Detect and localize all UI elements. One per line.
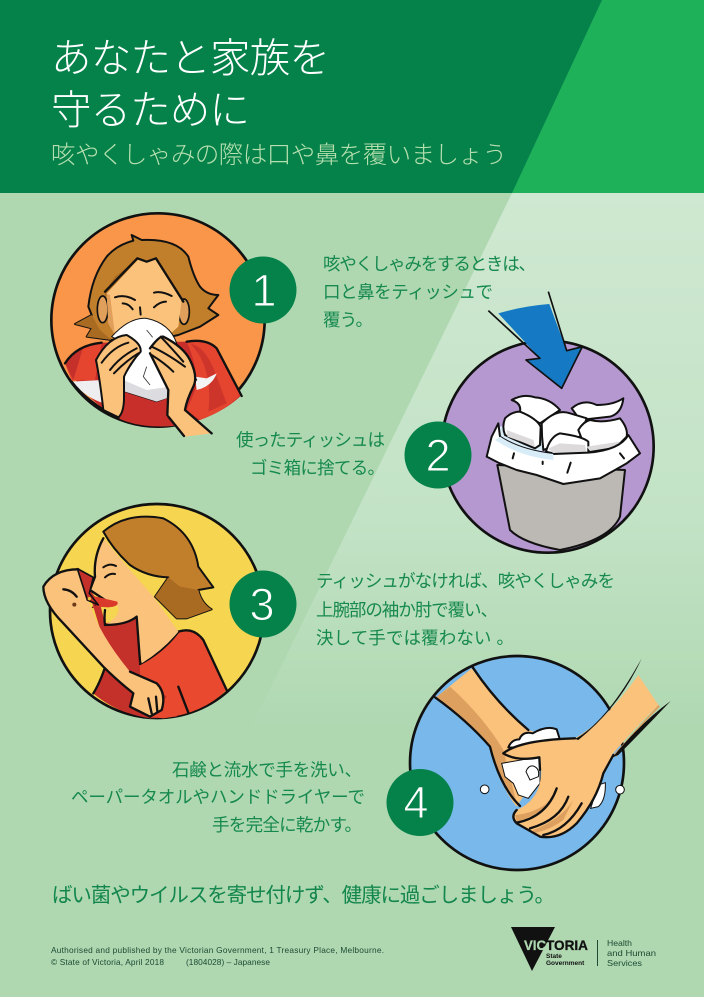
step 4 text: 手を完全に乾かす。 bbox=[212, 815, 362, 835]
badge 4 bbox=[386, 769, 454, 836]
illustration 4: washing hands bbox=[410, 656, 671, 870]
badge 3: 3 bbox=[249, 579, 275, 630]
badge 2: 2 bbox=[425, 430, 451, 481]
illustration 3: person sneezing into sleeve bbox=[43, 504, 264, 718]
illustration 2: tissues in a bin bbox=[442, 292, 654, 553]
header band bbox=[0, 0, 704, 193]
illustration 1: person sneezing into tissue bbox=[51, 213, 265, 437]
step 3 text: 決して手では覆わない 。 bbox=[316, 628, 514, 648]
badge 3 bbox=[230, 570, 296, 638]
step 3 text bbox=[316, 571, 615, 648]
lighter diagonal band bbox=[120, 193, 704, 997]
logo: Victoria State Government bbox=[511, 927, 656, 971]
title: 守るために bbox=[51, 87, 250, 133]
step 1 text: 覆う。 bbox=[323, 310, 373, 330]
badge 1: 1 bbox=[251, 265, 277, 316]
subtitle: 咳やくしゃみの際は口や鼻を覆いましょう bbox=[51, 141, 507, 169]
step 4 text: 石鹸と流水で手を洗い、 bbox=[172, 760, 362, 780]
logo: Victoria State Government: Health bbox=[607, 938, 632, 948]
footer credits: © State of Victoria, April 2018 bbox=[51, 957, 164, 967]
logo: Victoria State Government: Government bbox=[546, 960, 585, 967]
logo: Victoria State Government: State bbox=[546, 953, 562, 960]
logo: Victoria State Government: TORIA bbox=[546, 937, 588, 953]
step 1 text: 口と鼻をティッシュで bbox=[323, 282, 493, 302]
step 4 text: ペーパータオルやハンドドライヤーで bbox=[71, 787, 365, 807]
step 4 text bbox=[71, 760, 365, 835]
title bbox=[51, 35, 330, 133]
title: あなたと家族を bbox=[51, 35, 330, 81]
footer credits bbox=[51, 945, 384, 967]
step 2 text: 使ったティッシュは bbox=[236, 430, 385, 450]
step 3 text: ティッシュがなければ、咳やくしゃみを bbox=[316, 571, 615, 591]
footer credits: Authorised and published by the Victorian Government, 1 Treasury Place, Melbourne. bbox=[51, 945, 384, 955]
step 1 text: 咳やくしゃみをするときは、 bbox=[323, 254, 536, 274]
badge 2 bbox=[404, 422, 472, 488]
closing message: ばい菌やウイルスを寄せ付けず、健康に過ごしましょう。 bbox=[52, 884, 555, 907]
footer credits: (1804028) – Japanese bbox=[186, 957, 270, 967]
step 2 text bbox=[236, 430, 385, 478]
step 2 text: ゴミ箱に捨てる。 bbox=[250, 458, 385, 478]
logo: Victoria State Government: VIC bbox=[524, 937, 546, 953]
step 3 text: 上腕部の袖か肘で覆い、 bbox=[316, 600, 498, 620]
badge 4: 4 bbox=[403, 777, 429, 828]
step 1 text bbox=[323, 254, 536, 330]
logo: Victoria State Government: and Human bbox=[607, 948, 656, 958]
badge 1 bbox=[230, 256, 296, 324]
logo: Victoria State Government: Services bbox=[607, 958, 642, 968]
